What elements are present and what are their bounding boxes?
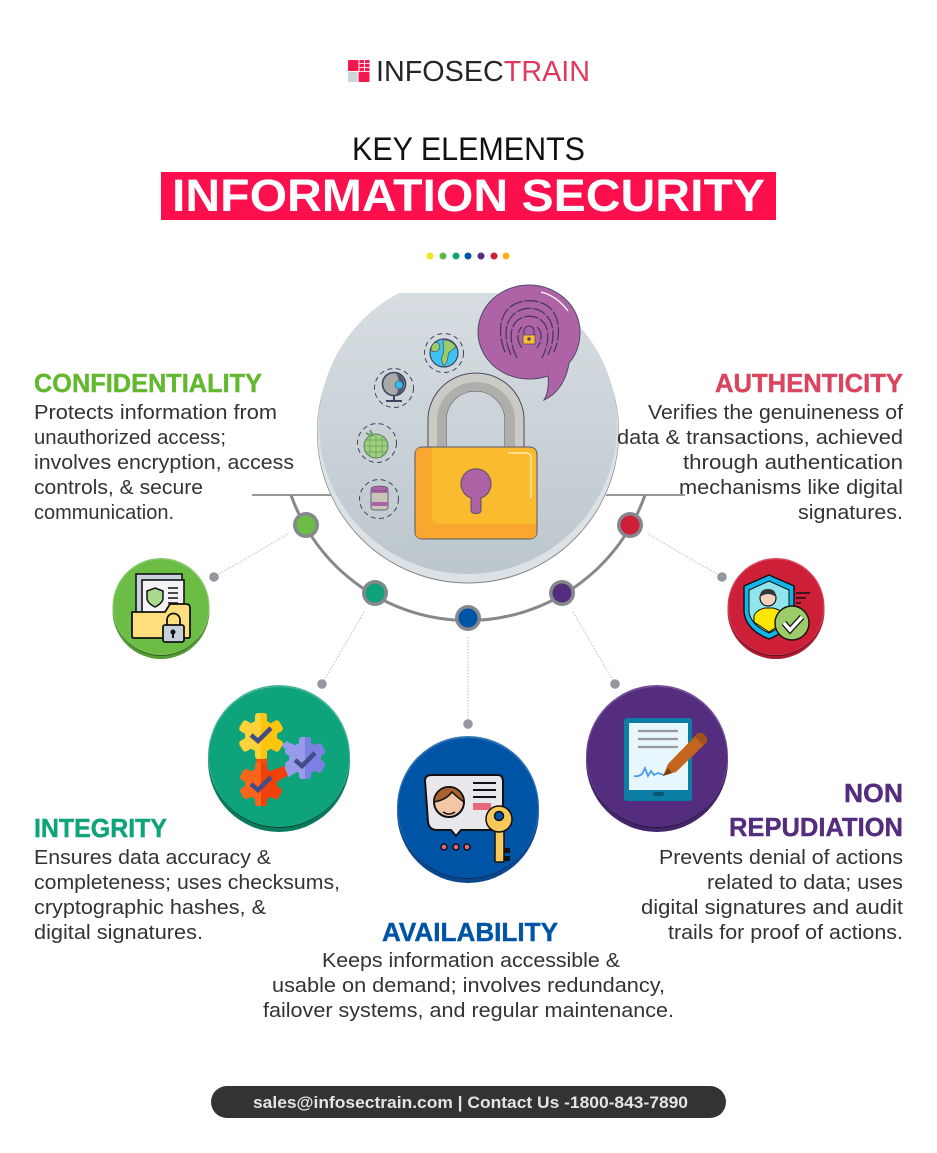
description: confidentiality: communication.	[34, 502, 174, 524]
logo wordmark: INFOSECTRAIN	[376, 56, 590, 88]
description: non repudiation: trails for proof of actions.	[668, 922, 903, 944]
description: availability: Keeps information accessible &	[322, 950, 621, 972]
contact footer pill: sales@infosectrain.com | Contact Us -1800-843-7890	[253, 1094, 688, 1112]
description: availability: usable on demand; involves redundancy,	[272, 975, 665, 997]
title: key elements: KEY ELEMENTS	[352, 131, 585, 167]
icon: database	[360, 480, 398, 518]
description: authenticity: through authentication	[683, 452, 903, 474]
description: authenticity: Verifies the genuineness of	[648, 402, 903, 424]
icon: green network globe	[358, 424, 396, 462]
description: integrity	[34, 847, 340, 944]
logo	[348, 56, 590, 88]
description: non repudiation: related to data; uses	[707, 872, 903, 894]
description: confidentiality: unauthorized access;	[34, 427, 226, 449]
node: availability	[455, 605, 481, 631]
contact footer pill	[211, 1086, 726, 1118]
title banner: information security: INFORMATION SECURITY	[172, 170, 765, 221]
description: confidentiality: Protects information from	[34, 402, 277, 424]
node: authenticity	[617, 512, 643, 538]
node: integrity	[362, 580, 388, 606]
description: confidentiality: involves encryption, access	[34, 452, 294, 474]
description: confidentiality: controls, & secure	[34, 477, 203, 499]
icon badge: integrity gears	[208, 685, 350, 832]
description: authenticity	[617, 402, 903, 524]
description: confidentiality	[34, 402, 294, 524]
icon: fingerprint speech bubble	[478, 285, 580, 400]
heading: integrity: INTEGRITY	[34, 813, 167, 843]
heading: non repudiation: REPUDIATION	[729, 812, 903, 842]
connector arc with side rules	[252, 495, 685, 620]
description: availability: failover systems, and regular maintenance.	[263, 1000, 674, 1022]
description: authenticity: signatures.	[798, 502, 903, 524]
icon badge: availability id card and key	[397, 736, 539, 883]
gear: orange	[239, 762, 283, 806]
colour dots	[426, 252, 510, 260]
description: integrity: completeness; uses checksums,	[34, 872, 340, 894]
text block: availability	[263, 917, 674, 1022]
dotted leader lines	[209, 534, 727, 729]
icon badge: confidentiality folder	[112, 558, 210, 659]
icon: padlock	[415, 373, 537, 539]
icon: earth globe	[424, 334, 464, 372]
connector nodes	[293, 512, 643, 631]
description: non repudiation: digital signatures and audit	[641, 897, 903, 919]
heading: authenticity: AUTHENTICITY	[715, 368, 903, 398]
text block: confidentiality	[34, 368, 294, 524]
node: non repudiation	[549, 580, 575, 606]
icon badge: authenticity shield	[728, 558, 824, 659]
node: confidentiality	[293, 512, 319, 538]
icon: webcam	[374, 368, 414, 408]
text block: non repudiation	[641, 778, 903, 944]
text block: authenticity	[617, 368, 903, 524]
icon badge: non repudiation tablet	[586, 685, 728, 832]
text block: integrity	[34, 813, 340, 944]
gear: yellow	[238, 713, 284, 759]
central disc	[317, 276, 619, 584]
heading: confidentiality: CONFIDENTIALITY	[34, 368, 262, 398]
heading: availability: AVAILABILITY	[382, 917, 558, 947]
heading: non repudiation: NON	[844, 778, 903, 808]
description: integrity: digital signatures.	[34, 922, 203, 944]
gear: violet	[284, 737, 326, 779]
description: authenticity: mechanisms like digital	[679, 477, 903, 499]
description: integrity: cryptographic hashes, &	[34, 897, 267, 919]
description: non repudiation	[641, 847, 903, 944]
logo mark	[348, 60, 370, 82]
description: authenticity: data & transactions, achieved	[617, 427, 903, 449]
description: non repudiation: Prevents denial of actions	[659, 847, 903, 869]
description: integrity: Ensures data accuracy &	[34, 847, 272, 869]
description: availability	[263, 950, 674, 1022]
heading: non repudiation	[729, 778, 903, 842]
